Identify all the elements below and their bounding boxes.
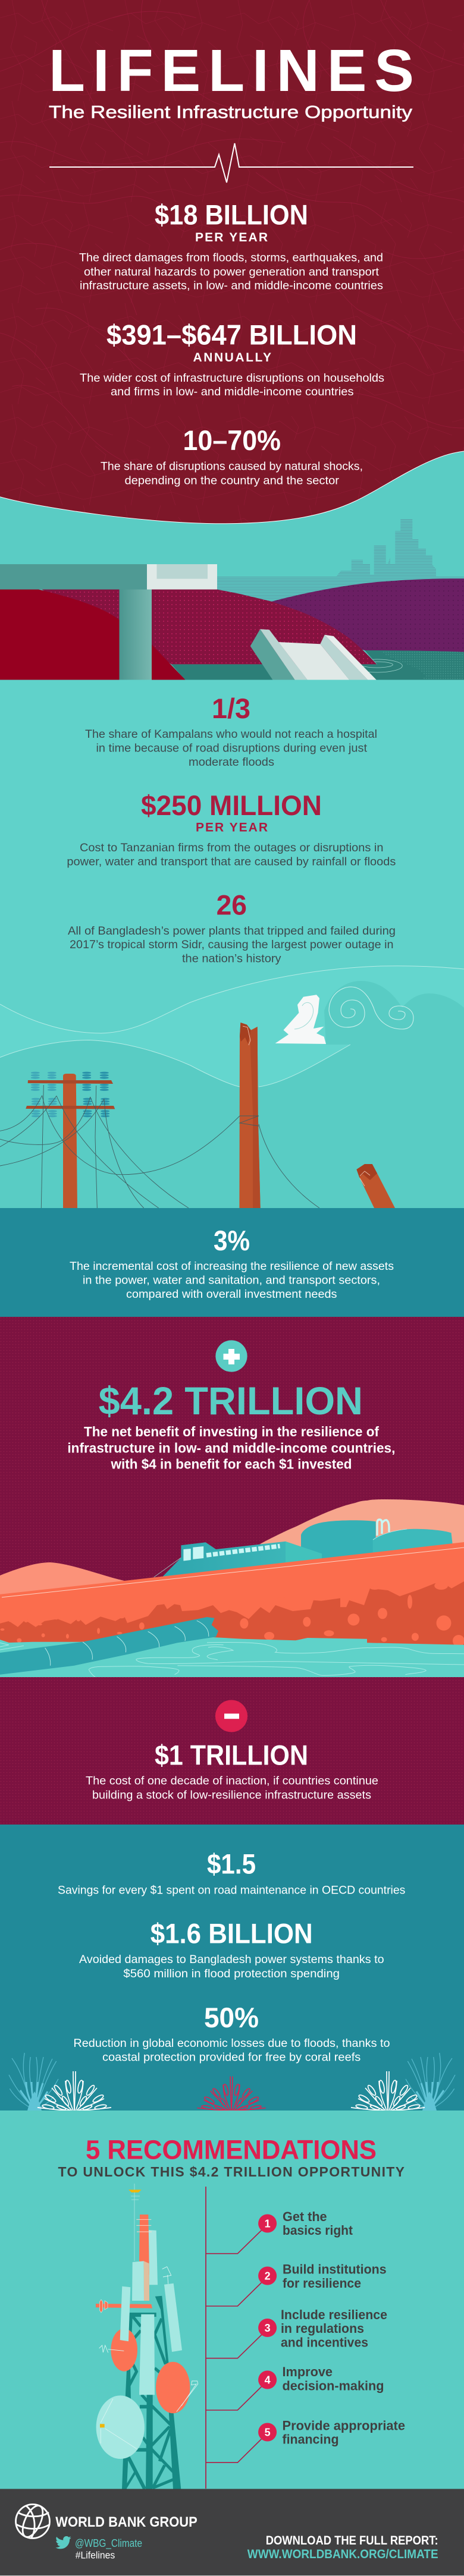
stat: $18 billion per year [79, 199, 383, 292]
sky wave [0, 451, 464, 680]
wind spirals [329, 987, 413, 1029]
red hill [0, 590, 186, 680]
heartbeat divider [49, 143, 413, 183]
footer [0, 2489, 464, 2576]
flood water [171, 650, 464, 680]
power lines [0, 1085, 319, 1208]
recommendation 3 [206, 2307, 387, 2358]
pale back panel [149, 2230, 158, 2285]
timeline stem [205, 2187, 206, 2489]
small orange dish [111, 2329, 137, 2371]
purple hill [272, 578, 464, 652]
description: other natural hazards to power generation and transport [84, 265, 380, 278]
centre panel [139, 2314, 155, 2395]
orange mast [139, 2215, 149, 2275]
recommendation 5: financing [282, 2432, 339, 2447]
figure: $250 MILLION [141, 790, 322, 821]
recommendation 1: 1 [265, 2218, 271, 2229]
white coral left [37, 2071, 111, 2111]
illustration: protected plant behind a levee [0, 1499, 464, 1677]
bridge pillar and beam [0, 564, 217, 680]
description: The wider cost of infrastructure disruptions on households [80, 372, 384, 385]
recommendation 3: and incentives [281, 2335, 368, 2349]
description: compared with overall investment needs [126, 1288, 337, 1301]
road map background texture [0, 0, 464, 535]
description: coastal protection provided for free by coral reefs [102, 2051, 361, 2064]
icon: plus [215, 1340, 247, 1372]
panel: cost of disruption [0, 0, 464, 535]
recommendation 5: 5 [265, 2427, 271, 2439]
figure: 10–70% [183, 424, 281, 456]
red coral centre [197, 2077, 266, 2111]
unit: PER YEAR [195, 231, 268, 244]
icon: World Bank globe [15, 2503, 50, 2540]
panel: recommendations [0, 2111, 464, 2489]
orange crossbar [96, 2300, 152, 2313]
figure: 1/3 [212, 693, 250, 724]
fallen pole stump [356, 1164, 395, 1208]
description [80, 372, 384, 398]
yellow dish [128, 2190, 142, 2193]
panel: net benefit [0, 1317, 464, 1677]
description: Savings for every $1 spent on road maintenance in OECD countries [58, 1883, 406, 1896]
broken pole [239, 1023, 261, 1208]
description [101, 460, 363, 487]
wind band [0, 966, 464, 1208]
description: The cost of one decade of inaction, if countries continue [86, 1775, 378, 1788]
title: Lifelines: LIFELINES [49, 37, 414, 104]
subheading: TO UNLOCK THIS $4.2 TRILLION OPPORTUNITY [58, 2164, 405, 2179]
plant building [154, 1542, 322, 1581]
figure: 50% [204, 2002, 259, 2033]
stat: 10–70% [101, 424, 363, 487]
figure: $1 TRILLION [155, 1740, 308, 1771]
description: Avoided damages to Bangladesh power systems thanks to [79, 1953, 384, 1966]
figure: $391–$647 BILLION [106, 319, 357, 350]
stat: 50% [73, 2002, 390, 2064]
description [67, 841, 396, 868]
wind lines [0, 966, 464, 1087]
power pole with insulators [26, 1072, 115, 1208]
recommendation 2 [206, 2262, 387, 2306]
illustration: flooded collapsed bridge [0, 451, 464, 680]
description: The share of disruptions caused by natural shocks, [101, 460, 363, 473]
dish struts and small aerials [99, 2267, 198, 2449]
description: The share of Kampalans who would not reach a hospital [85, 728, 377, 741]
tower lattice [122, 2296, 181, 2489]
description: All of Bangladesh’s power plants that tripped and failed during [68, 924, 396, 938]
description: moderate floods [189, 756, 274, 769]
city skyline [336, 519, 436, 577]
description: depending on the country and the sector [125, 474, 340, 487]
white cloud [275, 995, 326, 1044]
description: power, water and transport that are caused by rainfall or floods [67, 855, 396, 868]
recommendation 4: Improve [282, 2364, 333, 2379]
fallen bridge deck [250, 629, 377, 680]
recommendation 4: 4 [265, 2374, 271, 2386]
shaded ground and clouds [0, 981, 464, 1208]
stat: $250 million per year [67, 790, 396, 868]
report URL: WWW.WORLDBANK.ORG/CLIMATE [247, 2547, 438, 2561]
description: The direct damages from floods, storms, earthquakes, and [79, 251, 383, 265]
unit: ANNUALLY [193, 351, 271, 364]
panel: incremental cost [0, 1208, 464, 1317]
description: Cost to Tanzanian firms from the outages or disruptions in [80, 841, 383, 854]
levee [0, 1542, 464, 1659]
recommendation 2: for resilience [283, 2276, 361, 2291]
description: Reduction in global economic losses due to floods, thanks to [73, 2037, 390, 2050]
icon: twitter bird [55, 2536, 71, 2549]
stat: 1/3 [85, 693, 377, 769]
large orange dish [156, 2362, 190, 2413]
hashtag: #Lifelines [76, 2549, 115, 2561]
recommendation 3: 3 [265, 2322, 271, 2334]
recommendation 2: 2 [265, 2270, 271, 2282]
recommendation 4: decision-making [282, 2378, 384, 2393]
subtitle: The Resilient Infrastructure Opportunity [49, 103, 412, 122]
twitter handle: @WBG_Climate [75, 2537, 142, 2550]
figure: $18 BILLION [155, 199, 308, 231]
illustration: telecom tower [96, 2184, 198, 2489]
description: infrastructure in low- and middle-income countries, [67, 1440, 395, 1456]
recommendation 3: in regulations [281, 2321, 364, 2336]
illustration: coral reefs [9, 2053, 455, 2111]
description: in the power, water and sanitation, and transport sectors, [83, 1273, 380, 1287]
description: The net benefit of investing in the resilience of [84, 1424, 379, 1439]
blue coral right [406, 2053, 455, 2111]
description [67, 1424, 395, 1472]
description [68, 924, 396, 965]
panel: consequences for people and firms [0, 680, 464, 1208]
recommendation 1 [206, 2209, 353, 2254]
description: $560 million in flood protection spending [123, 1967, 340, 1980]
recommendation 5 [206, 2418, 405, 2462]
description: the nation’s history [182, 952, 281, 965]
pale dish [96, 2395, 145, 2459]
description: building a stock of low-resilience infrastructure assets [92, 1788, 371, 1801]
description: 2017’s tropical storm Sidr, causing the largest power outage in [70, 938, 394, 951]
water swirls [0, 1642, 464, 1677]
description [70, 1260, 394, 1301]
description: and firms in low- and middle-income countries [111, 385, 354, 398]
figure: 3% [214, 1225, 250, 1256]
stat: $1.5 [58, 1848, 406, 1896]
description: The incremental cost of increasing the resilience of new assets [70, 1260, 394, 1273]
drainage pipe [0, 1617, 218, 1675]
water ripples [351, 659, 402, 672]
box antenna [132, 2261, 149, 2301]
description [79, 251, 383, 292]
description: with $4 in benefit for each $1 invested [111, 1457, 352, 1472]
description [85, 728, 377, 769]
stat: $1.6 billion [79, 1918, 384, 1980]
white coral right [351, 2071, 425, 2111]
download call to action: DOWNLOAD THE FULL REPORT: [266, 2534, 438, 2547]
magenta hill [42, 590, 377, 664]
heading: 5 RECOMMENDATIONS [86, 2134, 377, 2165]
antenna mast [131, 2184, 140, 2261]
recommendation 2: Build institutions [283, 2262, 387, 2277]
panel: savings and avoided losses [0, 1825, 464, 2111]
description: infrastructure assets, in low- and middle-income countries [80, 279, 383, 292]
icon: minus [215, 1700, 247, 1732]
logo text: WORLD BANK GROUP [55, 2514, 197, 2530]
far hills [261, 1499, 464, 1558]
recommendation 3: Include resilience [281, 2307, 387, 2322]
left panel [120, 2286, 130, 2341]
distant water [217, 577, 464, 602]
recommendation 1: Get the [283, 2209, 327, 2224]
yellow feed [100, 2424, 105, 2427]
unit: PER YEAR [196, 821, 268, 835]
figure: $1.6 BILLION [151, 1918, 313, 1949]
recommendation 1: basics right [283, 2223, 353, 2238]
stat: $391–$647 billion annually [80, 319, 384, 398]
flood water [0, 1637, 464, 1677]
description [79, 1953, 384, 1980]
panel: cost of inaction [0, 1677, 464, 1825]
blue coral left [9, 2053, 58, 2111]
description [86, 1775, 378, 1801]
recommendation 5: Provide appropriate [282, 2418, 405, 2433]
recommendation 4 [206, 2364, 384, 2410]
illustration: storm and broken power poles [0, 966, 464, 1208]
figure: $1.5 [207, 1848, 256, 1879]
description [73, 2037, 390, 2064]
right panel [164, 2284, 182, 2352]
figure: $4.2 TRILLION [99, 1379, 363, 1423]
stat: 26 power plants [68, 889, 396, 965]
figure: 26 [217, 889, 247, 920]
levee rock face [0, 1581, 464, 1659]
storage tanks [301, 1520, 453, 1561]
description: in time because of road disruptions during even just [96, 742, 368, 755]
